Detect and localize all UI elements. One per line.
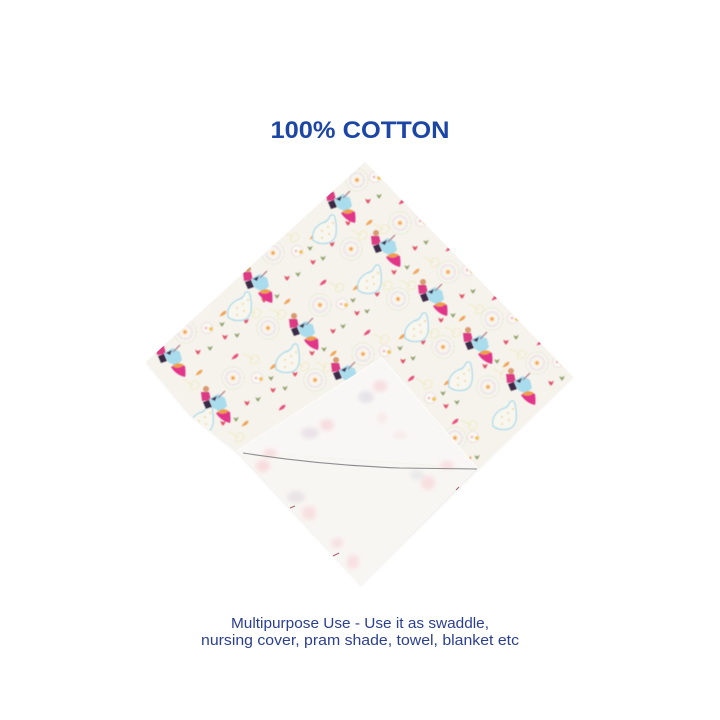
printed pattern	[156, 169, 565, 462]
caption line 1: Multipurpose Use - Use it as swaddle,	[231, 616, 489, 632]
caption line 2: nursing cover, pram shade, towel, blanket etc	[201, 633, 519, 649]
pattern: small flowers	[202, 172, 564, 442]
pattern: rosettes	[174, 169, 548, 449]
pattern: elephants	[190, 215, 516, 434]
pattern: figures on spinning tops	[156, 186, 536, 423]
hem ticks	[290, 487, 459, 556]
see-through ghost print	[256, 380, 454, 569]
pattern: sprigs	[195, 194, 565, 462]
cloth upper printed surface	[146, 162, 573, 470]
cloth shadow	[146, 163, 573, 586]
cloth folded flap	[237, 358, 477, 468]
pattern: curls	[183, 224, 526, 442]
caption	[201, 616, 519, 649]
cloth lower back triangle	[237, 451, 477, 585]
title: 100% COTTON	[270, 117, 450, 144]
fold line	[243, 453, 477, 469]
flap stitched edges	[237, 358, 477, 468]
infographic canvas	[146, 121, 573, 648]
product: folded cotton swaddle cloth	[146, 162, 573, 586]
